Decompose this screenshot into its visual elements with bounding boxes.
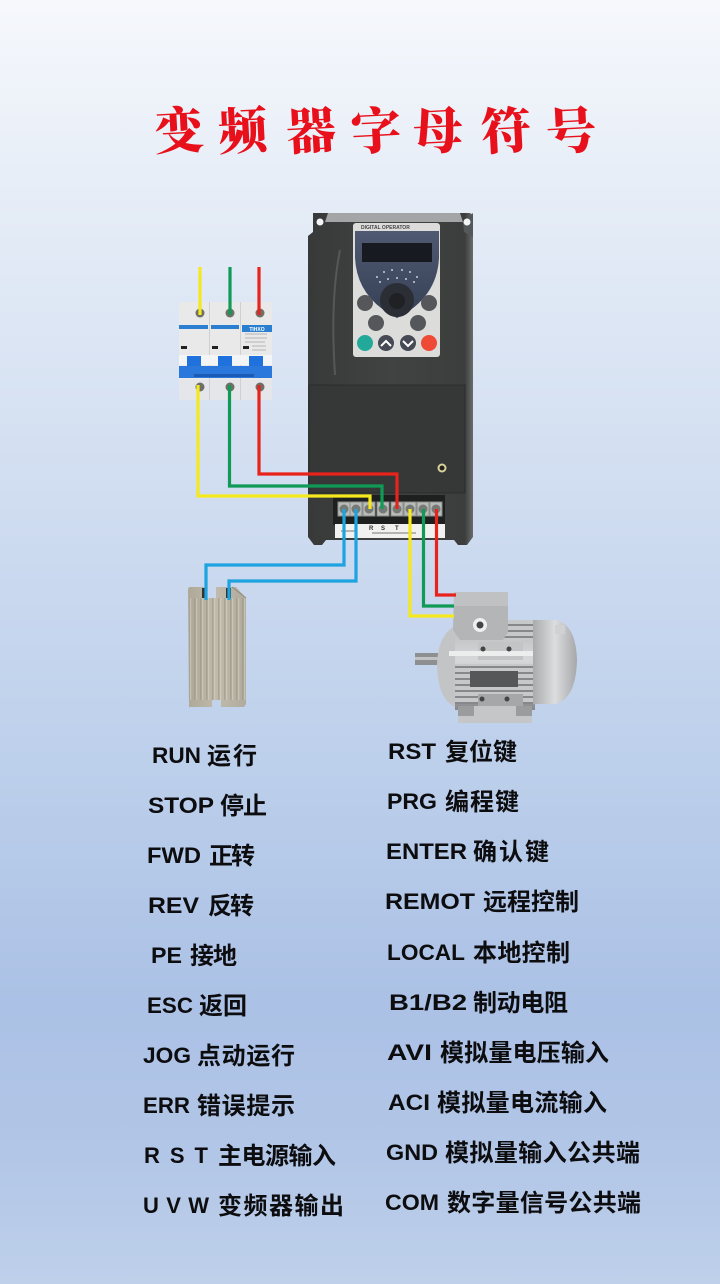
COM: 数字量信号公共端	[447, 1190, 641, 1217]
R S T: R S T	[144, 1143, 209, 1168]
motor finned body	[455, 620, 535, 710]
REMOT: 远程控制	[483, 889, 579, 916]
LOCAL	[387, 940, 570, 967]
R S T: 主电源输入	[218, 1143, 336, 1170]
LOCAL: 本地控制	[473, 940, 570, 967]
PE: 接地	[190, 943, 237, 970]
JOG: 点动运行	[197, 1043, 295, 1070]
STOP	[148, 793, 267, 820]
RUN: 运行	[207, 743, 257, 770]
REMOT: REMOT	[385, 889, 476, 914]
REMOT	[385, 889, 579, 916]
FWD	[147, 843, 255, 870]
knob	[380, 283, 414, 317]
keypad faceplate	[355, 231, 439, 318]
top bevel	[325, 213, 463, 222]
B1/B2: B1/B2	[389, 990, 467, 1015]
STOP: STOP	[148, 793, 214, 818]
terminal cover	[309, 385, 465, 493]
terminal label strip: S	[381, 526, 385, 532]
COM: COM	[385, 1190, 439, 1215]
motor	[415, 592, 577, 723]
brake resistor	[188, 587, 246, 707]
operator panel	[353, 223, 440, 357]
motor feet	[458, 706, 532, 723]
terminal label strip	[335, 524, 445, 538]
ERR: ERR	[143, 1093, 190, 1118]
mounting holes	[316, 218, 324, 226]
GND: 模拟量输入公共端	[445, 1140, 640, 1167]
RUN: RUN	[152, 743, 201, 768]
ENTER: ENTER	[386, 839, 467, 864]
display	[362, 243, 432, 262]
PE	[151, 943, 237, 970]
REV: 反转	[208, 893, 254, 920]
ENTER	[386, 839, 549, 866]
PRG: 编程键	[445, 789, 519, 816]
motor rating plate	[470, 671, 518, 687]
U V W: 变频器输出	[218, 1192, 344, 1220]
symbol list: right column	[385, 738, 641, 1217]
FWD: 正转	[209, 843, 255, 870]
motor terminal box	[453, 592, 508, 640]
motor fan cover	[533, 620, 577, 704]
JOG: JOG	[143, 1043, 191, 1068]
motor wires	[410, 509, 456, 616]
motor shaft	[415, 653, 438, 665]
ESC	[147, 993, 247, 1020]
PRG: PRG	[387, 789, 437, 814]
REV: REV	[148, 893, 199, 918]
GND: GND	[386, 1140, 438, 1165]
U V W	[143, 1192, 344, 1220]
AVI: 模拟量电压输入	[440, 1040, 609, 1067]
title: 变频器字母符号	[152, 90, 598, 165]
ENTER: 确认键	[473, 839, 549, 866]
status LEDs	[376, 269, 418, 283]
FWD: FWD	[147, 843, 201, 868]
U V W: U V W	[143, 1193, 209, 1218]
buttons	[357, 295, 437, 351]
STOP: 停止	[220, 793, 267, 820]
RUN	[152, 743, 257, 770]
R S T	[144, 1143, 336, 1170]
RST: 复位键	[445, 738, 517, 766]
LOCAL: LOCAL	[387, 940, 465, 965]
wires from supply to breaker	[200, 267, 259, 315]
terminal block	[333, 495, 445, 525]
inverter	[308, 213, 473, 545]
circuit breaker	[179, 302, 272, 400]
brake resistor wires	[206, 509, 356, 600]
inverter body	[308, 213, 473, 545]
ESC: ESC	[147, 993, 193, 1018]
AVI: AVI	[387, 1040, 432, 1065]
B1/B2: 制动电阻	[473, 990, 568, 1017]
terminal label strip: R	[369, 526, 374, 532]
symbol list: left column	[143, 743, 344, 1220]
REV	[148, 893, 254, 920]
screw hole	[438, 464, 446, 472]
operator panel: DIGITAL OPERATOR	[361, 225, 410, 231]
ACI: ACI	[388, 1090, 430, 1115]
circuit breaker: TIHXO	[249, 327, 265, 333]
PRG	[387, 789, 519, 816]
PE: PE	[151, 943, 182, 968]
RST: RST	[388, 739, 437, 764]
ACI: 模拟量电流输入	[437, 1090, 607, 1117]
ERR: 错误提示	[197, 1093, 295, 1120]
mounting bosses	[478, 642, 523, 660]
motor front flange	[437, 625, 458, 708]
input wires: breaker to inverter	[198, 385, 397, 509]
terminals	[338, 502, 442, 516]
RST	[388, 738, 517, 766]
terminal label strip: T	[395, 526, 399, 532]
ERR	[143, 1093, 295, 1120]
ESC: 返回	[199, 993, 247, 1020]
B1/B2	[389, 990, 568, 1017]
JOG	[143, 1043, 295, 1070]
